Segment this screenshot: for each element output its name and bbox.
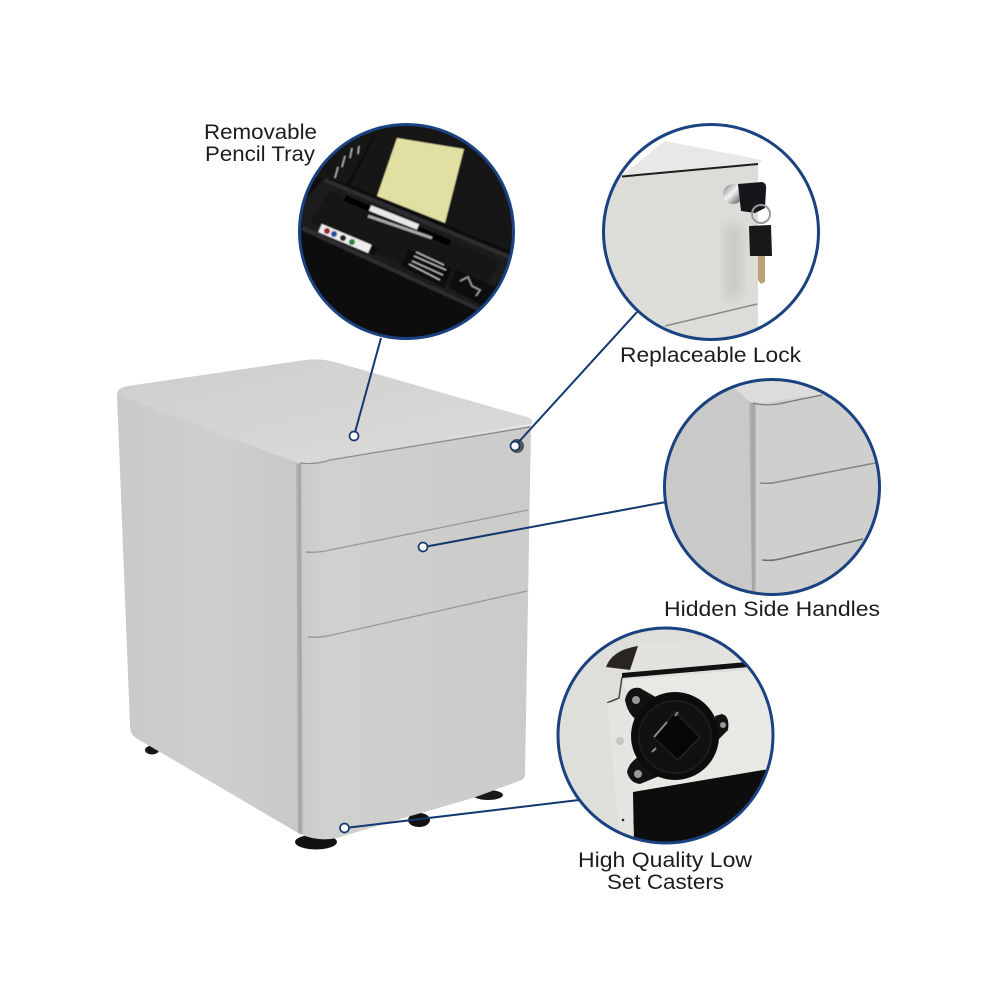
- label: high quality low set casters: High Quality Low: [578, 849, 753, 872]
- curved opening: [606, 646, 638, 670]
- top drawer seam: [300, 427, 530, 464]
- top seam: [753, 395, 822, 405]
- black base: [633, 768, 775, 850]
- dry erase marker: [320, 228, 370, 249]
- caster ear right: [715, 714, 728, 740]
- housing ring: [639, 701, 711, 773]
- tray top lip: [324, 178, 510, 259]
- lower seam: [665, 304, 757, 326]
- light base plate: [622, 668, 775, 792]
- caster ear top: [625, 688, 666, 722]
- label: high quality low set casters: Set Casters: [607, 871, 724, 894]
- callout: casters photo: [555, 625, 780, 850]
- dark slit: [622, 662, 760, 678]
- key ring: [752, 205, 770, 223]
- strip screw hole: [616, 737, 624, 745]
- front corner edge: [296, 463, 303, 834]
- white marker: [370, 208, 418, 227]
- label: removable pencil tray: Removable: [204, 121, 317, 144]
- white strip: [607, 700, 634, 840]
- binder clip compartment: [449, 270, 495, 306]
- caster: back right: [473, 790, 503, 800]
- cabinet side panel: [117, 394, 300, 834]
- connector: pencil tray: [350, 338, 381, 440]
- caster ear bottom: [627, 756, 662, 784]
- callout: lock photo: [600, 120, 825, 345]
- lock cylinder: [723, 184, 740, 204]
- label: replaceable lock: Replaceable Lock: [620, 344, 802, 367]
- hanging rail clips: [335, 146, 359, 178]
- label: removable pencil tray: Pencil Tray: [205, 143, 316, 166]
- tray front lip: [301, 226, 480, 311]
- spare key blade: [758, 256, 765, 284]
- connector: side handles: [418, 502, 666, 552]
- silver pen: [368, 216, 432, 238]
- paperclips: [409, 252, 446, 280]
- shadow on face: [725, 225, 742, 300]
- marker colour dots: [324, 228, 355, 245]
- hub: [654, 712, 700, 760]
- caster: center: [408, 813, 430, 827]
- key head: [738, 182, 766, 213]
- upper panel: [622, 635, 780, 673]
- drawer fronts: [761, 394, 823, 404]
- drawer seam: [760, 463, 875, 483]
- label: removable pencil tray: [204, 121, 317, 166]
- top seam: [622, 164, 758, 176]
- legal pad: [377, 138, 464, 223]
- screws: [632, 696, 726, 778]
- filing cabinet: [117, 359, 532, 850]
- drawer rail: [316, 130, 377, 184]
- axle highlight: [652, 712, 678, 752]
- cabinet front panel: [296, 425, 531, 839]
- caster housing: [631, 692, 719, 780]
- binder clips: [460, 277, 480, 296]
- small hole: [622, 819, 624, 821]
- infographic canvas: [117, 123, 881, 889]
- tray body: [296, 178, 510, 308]
- drawer back wall: [350, 125, 520, 255]
- paperclip compartment: [401, 249, 452, 288]
- connector: lock: [510, 312, 637, 450]
- marker cap: [370, 249, 376, 252]
- spare key head: [749, 225, 772, 256]
- lock: [510, 439, 524, 453]
- callout: side handles photo: [660, 375, 885, 600]
- second drawer seam: [306, 510, 528, 552]
- caster: front: [295, 834, 337, 850]
- callout: pencil tray photo: [295, 120, 520, 345]
- black pens: [345, 198, 450, 243]
- tray inner floor: [330, 196, 488, 287]
- lower drawer seam: [762, 539, 863, 560]
- cabinet top: [734, 381, 822, 404]
- corner strip: [749, 402, 756, 595]
- caster: back left: [145, 746, 159, 754]
- cabinet top: [620, 141, 762, 177]
- drawer face: [600, 164, 758, 345]
- label: hidden side handles: Hidden Side Handles: [664, 598, 880, 621]
- connector: casters: [340, 800, 579, 832]
- label: high quality low set casters: [578, 849, 753, 894]
- cabinet top panel: [117, 359, 532, 463]
- third drawer seam: [308, 591, 527, 637]
- side bracket edge: [607, 677, 622, 703]
